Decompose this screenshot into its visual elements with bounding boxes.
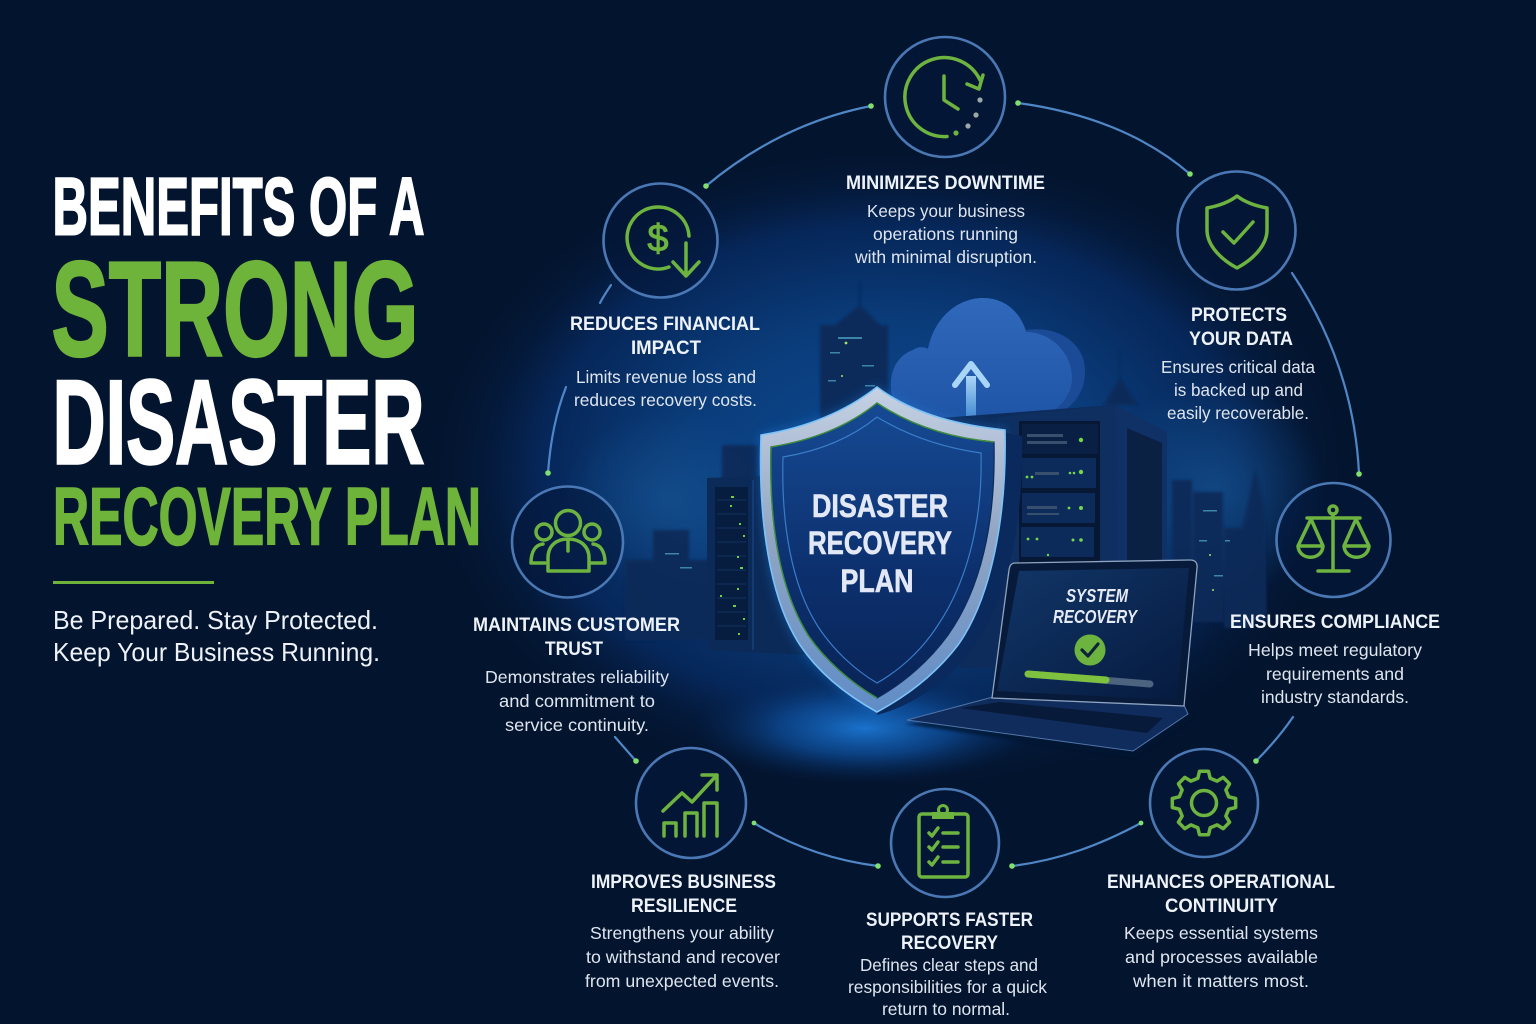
title line 4: RECOVERY PLAN <box>53 472 481 562</box>
description <box>854 201 1037 267</box>
heading: ENHANCES OPERATIONAL <box>1107 871 1335 893</box>
title block <box>52 162 481 667</box>
icon: gear <box>1150 749 1258 857</box>
laptop: screen text <box>1053 586 1139 627</box>
arrow: upload <box>955 364 987 420</box>
description: Limits revenue loss and <box>576 367 756 387</box>
icon: clipboard <box>891 789 999 897</box>
laptop: keyboard <box>960 702 1163 733</box>
description: reduces recovery costs. <box>574 390 757 410</box>
icon: growth chart <box>636 748 746 858</box>
connector arcs <box>545 100 1362 869</box>
shield: glow <box>761 387 1005 712</box>
title line 3: DISASTER <box>52 356 424 490</box>
tagline: Keep Your Business Running. <box>53 637 380 667</box>
heading: SUPPORTS FASTER <box>866 909 1033 931</box>
description <box>1248 640 1422 707</box>
icon: clock <box>885 37 1005 157</box>
heading: PROTECTS <box>1191 304 1287 326</box>
icon: shield check <box>1178 172 1296 290</box>
server rack: left <box>707 476 810 655</box>
description <box>574 367 757 410</box>
shield: inner line <box>783 417 981 683</box>
heading: CONTINUITY <box>1165 895 1278 917</box>
cloud: rear layer <box>891 298 1085 420</box>
benefit: maintains customer trust <box>473 486 680 735</box>
tagline: Be Prepared. Stay Protected. <box>53 605 378 635</box>
description: and processes available <box>1125 947 1318 967</box>
server rack: right <box>940 405 1167 668</box>
shield: depth <box>877 405 1022 715</box>
description <box>585 923 780 991</box>
description: operations running <box>873 224 1018 244</box>
icon: dollar down: $ <box>647 218 669 260</box>
shield: title: DISASTER <box>812 488 948 524</box>
description: Keeps essential systems <box>1124 923 1318 943</box>
icon: people <box>512 486 623 598</box>
heading <box>591 871 776 917</box>
heading <box>473 614 680 660</box>
description <box>1161 357 1315 423</box>
heading <box>570 313 760 359</box>
description: responsibilities for a quick <box>848 977 1047 997</box>
shield: title: RECOVERY <box>808 525 952 561</box>
description: with minimal disruption. <box>854 247 1037 267</box>
title line 2: STRONG <box>52 234 418 384</box>
icon: check badge <box>1074 634 1106 666</box>
icon: scales <box>1276 483 1390 597</box>
laptop: lid <box>992 560 1197 706</box>
laptop <box>905 560 1197 758</box>
heading: RESILIENCE <box>631 895 737 917</box>
laptop: screen <box>997 568 1189 700</box>
heading <box>1189 304 1293 350</box>
description: Helps meet regulatory <box>1248 640 1422 660</box>
laptop: shadow <box>905 700 1195 758</box>
heading: MINIMIZES DOWNTIME <box>846 172 1045 194</box>
description: Defines clear steps and <box>860 955 1038 975</box>
benefit: supports faster recovery <box>848 789 1047 1019</box>
heading: IMPROVES BUSINESS <box>591 871 776 893</box>
heading <box>866 909 1033 954</box>
benefit: ensures compliance <box>1230 483 1440 707</box>
description: industry standards. <box>1261 687 1409 707</box>
laptop: screen text: RECOVERY <box>1053 607 1139 627</box>
heading: REDUCES FINANCIAL <box>570 313 760 335</box>
cloud: front layer <box>891 298 1072 420</box>
divider <box>53 581 214 584</box>
description: Ensures critical data <box>1161 357 1315 377</box>
description: return to normal. <box>882 999 1010 1019</box>
title line 1: BENEFITS OF A <box>52 162 424 252</box>
description <box>1124 923 1318 991</box>
progress bar <box>1028 674 1150 684</box>
description: Strengthens your ability <box>590 923 774 943</box>
description: to withstand and recover <box>586 947 780 967</box>
benefit: minimizes downtime <box>846 37 1045 267</box>
description: and commitment to <box>499 691 655 711</box>
central shield <box>761 387 1022 715</box>
description: requirements and <box>1266 664 1404 684</box>
laptop: screen text: SYSTEM <box>1066 586 1129 606</box>
heading: MAINTAINS CUSTOMER <box>473 614 680 636</box>
heading: TRUST <box>545 638 603 660</box>
heading: IMPACT <box>631 337 701 359</box>
description: Keeps your business <box>867 201 1025 221</box>
description: when it matters most. <box>1132 971 1309 991</box>
description <box>485 667 669 735</box>
shield: rim <box>761 387 1005 712</box>
cloud with upload arrow <box>891 298 1085 420</box>
laptop: base <box>907 697 1188 751</box>
heading: ENSURES COMPLIANCE <box>1230 611 1440 633</box>
benefit: reduces financial impact <box>570 184 760 410</box>
shield: green edge <box>771 403 994 698</box>
description <box>848 955 1047 1019</box>
benefit: protects your data <box>1161 172 1315 423</box>
heading: YOUR DATA <box>1189 328 1293 350</box>
description: service continuity. <box>505 715 649 735</box>
description: is backed up and <box>1174 380 1303 400</box>
heading: RECOVERY <box>901 932 998 954</box>
icon: dollar down <box>604 184 718 298</box>
server bays <box>1019 421 1100 566</box>
heading <box>1107 871 1335 917</box>
description: easily recoverable. <box>1167 403 1309 423</box>
shield: title: PLAN <box>840 563 914 599</box>
benefit: improves business resilience <box>585 748 780 991</box>
description: Demonstrates reliability <box>485 667 669 687</box>
shield: title <box>808 488 952 599</box>
benefit: enhances operational continuity <box>1107 749 1335 991</box>
city skyline <box>625 283 1267 640</box>
shield: panel <box>771 403 994 698</box>
tagline <box>53 605 380 667</box>
description: from unexpected events. <box>585 971 779 991</box>
